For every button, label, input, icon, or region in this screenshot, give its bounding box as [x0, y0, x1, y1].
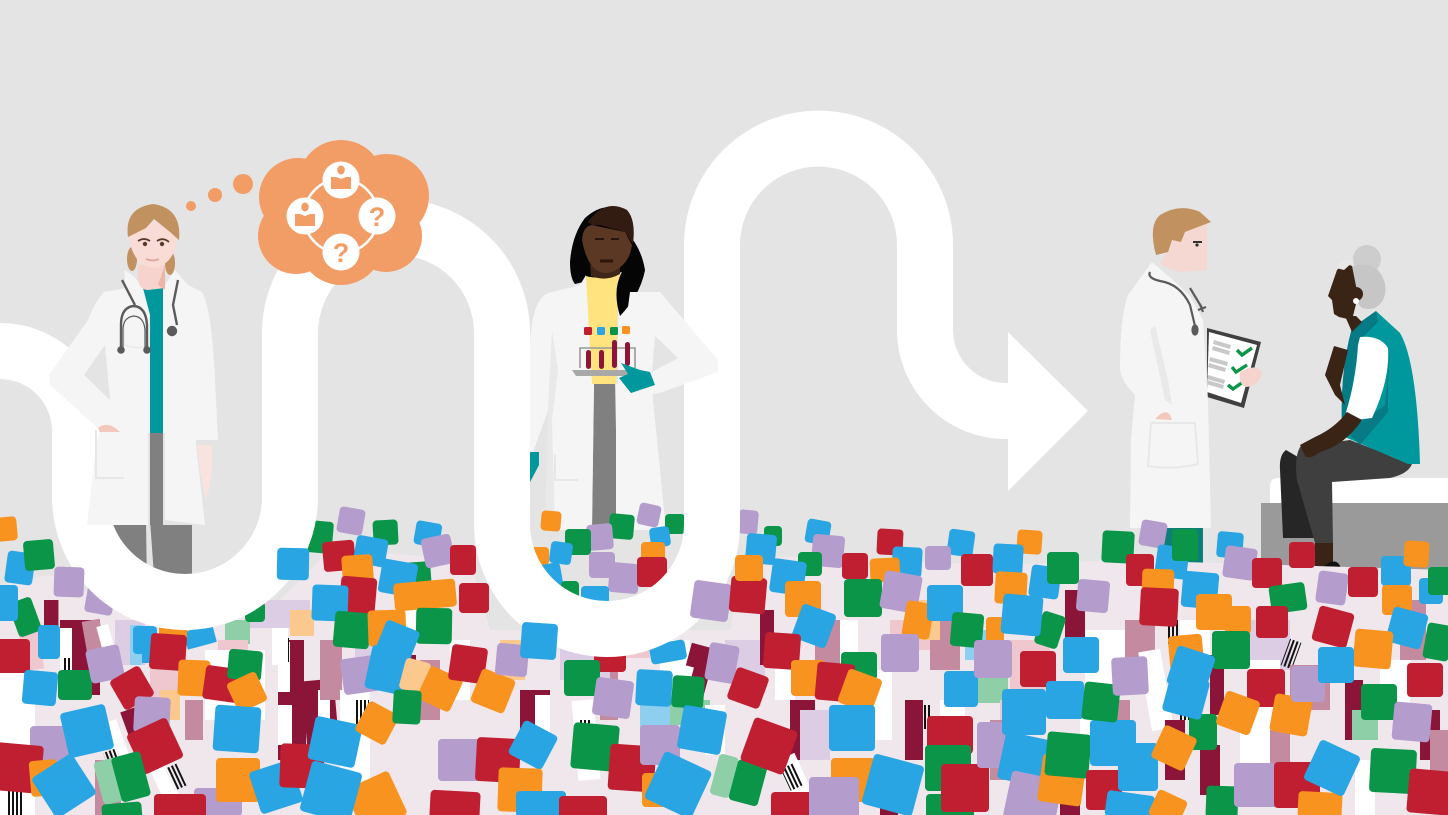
patient torso in teal vest — [1342, 311, 1420, 464]
doctor coat — [1120, 262, 1211, 528]
technician right arm over the path — [625, 292, 718, 395]
scattered tube bodies — [0, 590, 1448, 815]
doctor white coat — [49, 270, 218, 525]
figure: male doctor with clipboard — [1120, 208, 1262, 565]
doctor shirt and trouser gap — [143, 288, 163, 525]
technician left glove — [528, 452, 539, 486]
tubes — [586, 340, 630, 369]
technician trousers — [592, 384, 618, 525]
ring — [304, 179, 378, 253]
pile of blood sample tubes — [0, 502, 1448, 815]
rack frame — [580, 348, 635, 368]
stethoscope — [118, 280, 178, 353]
white winding path with arrowhead — [0, 139, 1088, 629]
doctor head — [128, 204, 179, 290]
clipboard with checklist — [1206, 328, 1261, 408]
question node right: ? — [369, 202, 385, 232]
technician hair back — [570, 207, 645, 316]
sample caps behind the path — [84, 502, 759, 672]
tube caps — [584, 326, 630, 335]
technician hair over coat — [616, 262, 645, 316]
figure: lab technician with test tubes — [528, 206, 672, 530]
question node bottom — [322, 234, 360, 270]
doctor head — [1153, 208, 1211, 272]
patient head with grey hair — [1328, 245, 1386, 332]
technician yellow top — [586, 274, 620, 384]
stethoscope — [1149, 272, 1206, 334]
technician coat — [530, 275, 672, 530]
patient arms and hands — [1300, 346, 1362, 457]
thought bubble — [186, 140, 429, 285]
doctor hair buns — [127, 247, 175, 275]
doctor hand — [197, 445, 212, 500]
cloud — [258, 140, 429, 285]
figure: female doctor lower body (legs) — [107, 520, 192, 590]
question node right — [358, 198, 396, 234]
doctor hand on clipboard — [1240, 368, 1262, 387]
teal glove — [619, 363, 655, 393]
technician head — [582, 206, 634, 279]
thought dots — [186, 174, 253, 211]
figure: female doctor with stethoscope — [49, 204, 218, 525]
figure: patient seated on exam table — [1261, 245, 1448, 578]
tray — [572, 370, 632, 376]
doctor scrub legs — [1161, 525, 1203, 565]
exam table — [1261, 478, 1448, 578]
person node top — [322, 162, 360, 198]
person node left — [286, 198, 324, 234]
test tube rack on tray — [572, 326, 655, 393]
patient legs — [1280, 440, 1412, 572]
coloured sample caps in front — [0, 506, 1448, 815]
question node bottom: ? — [333, 238, 349, 268]
